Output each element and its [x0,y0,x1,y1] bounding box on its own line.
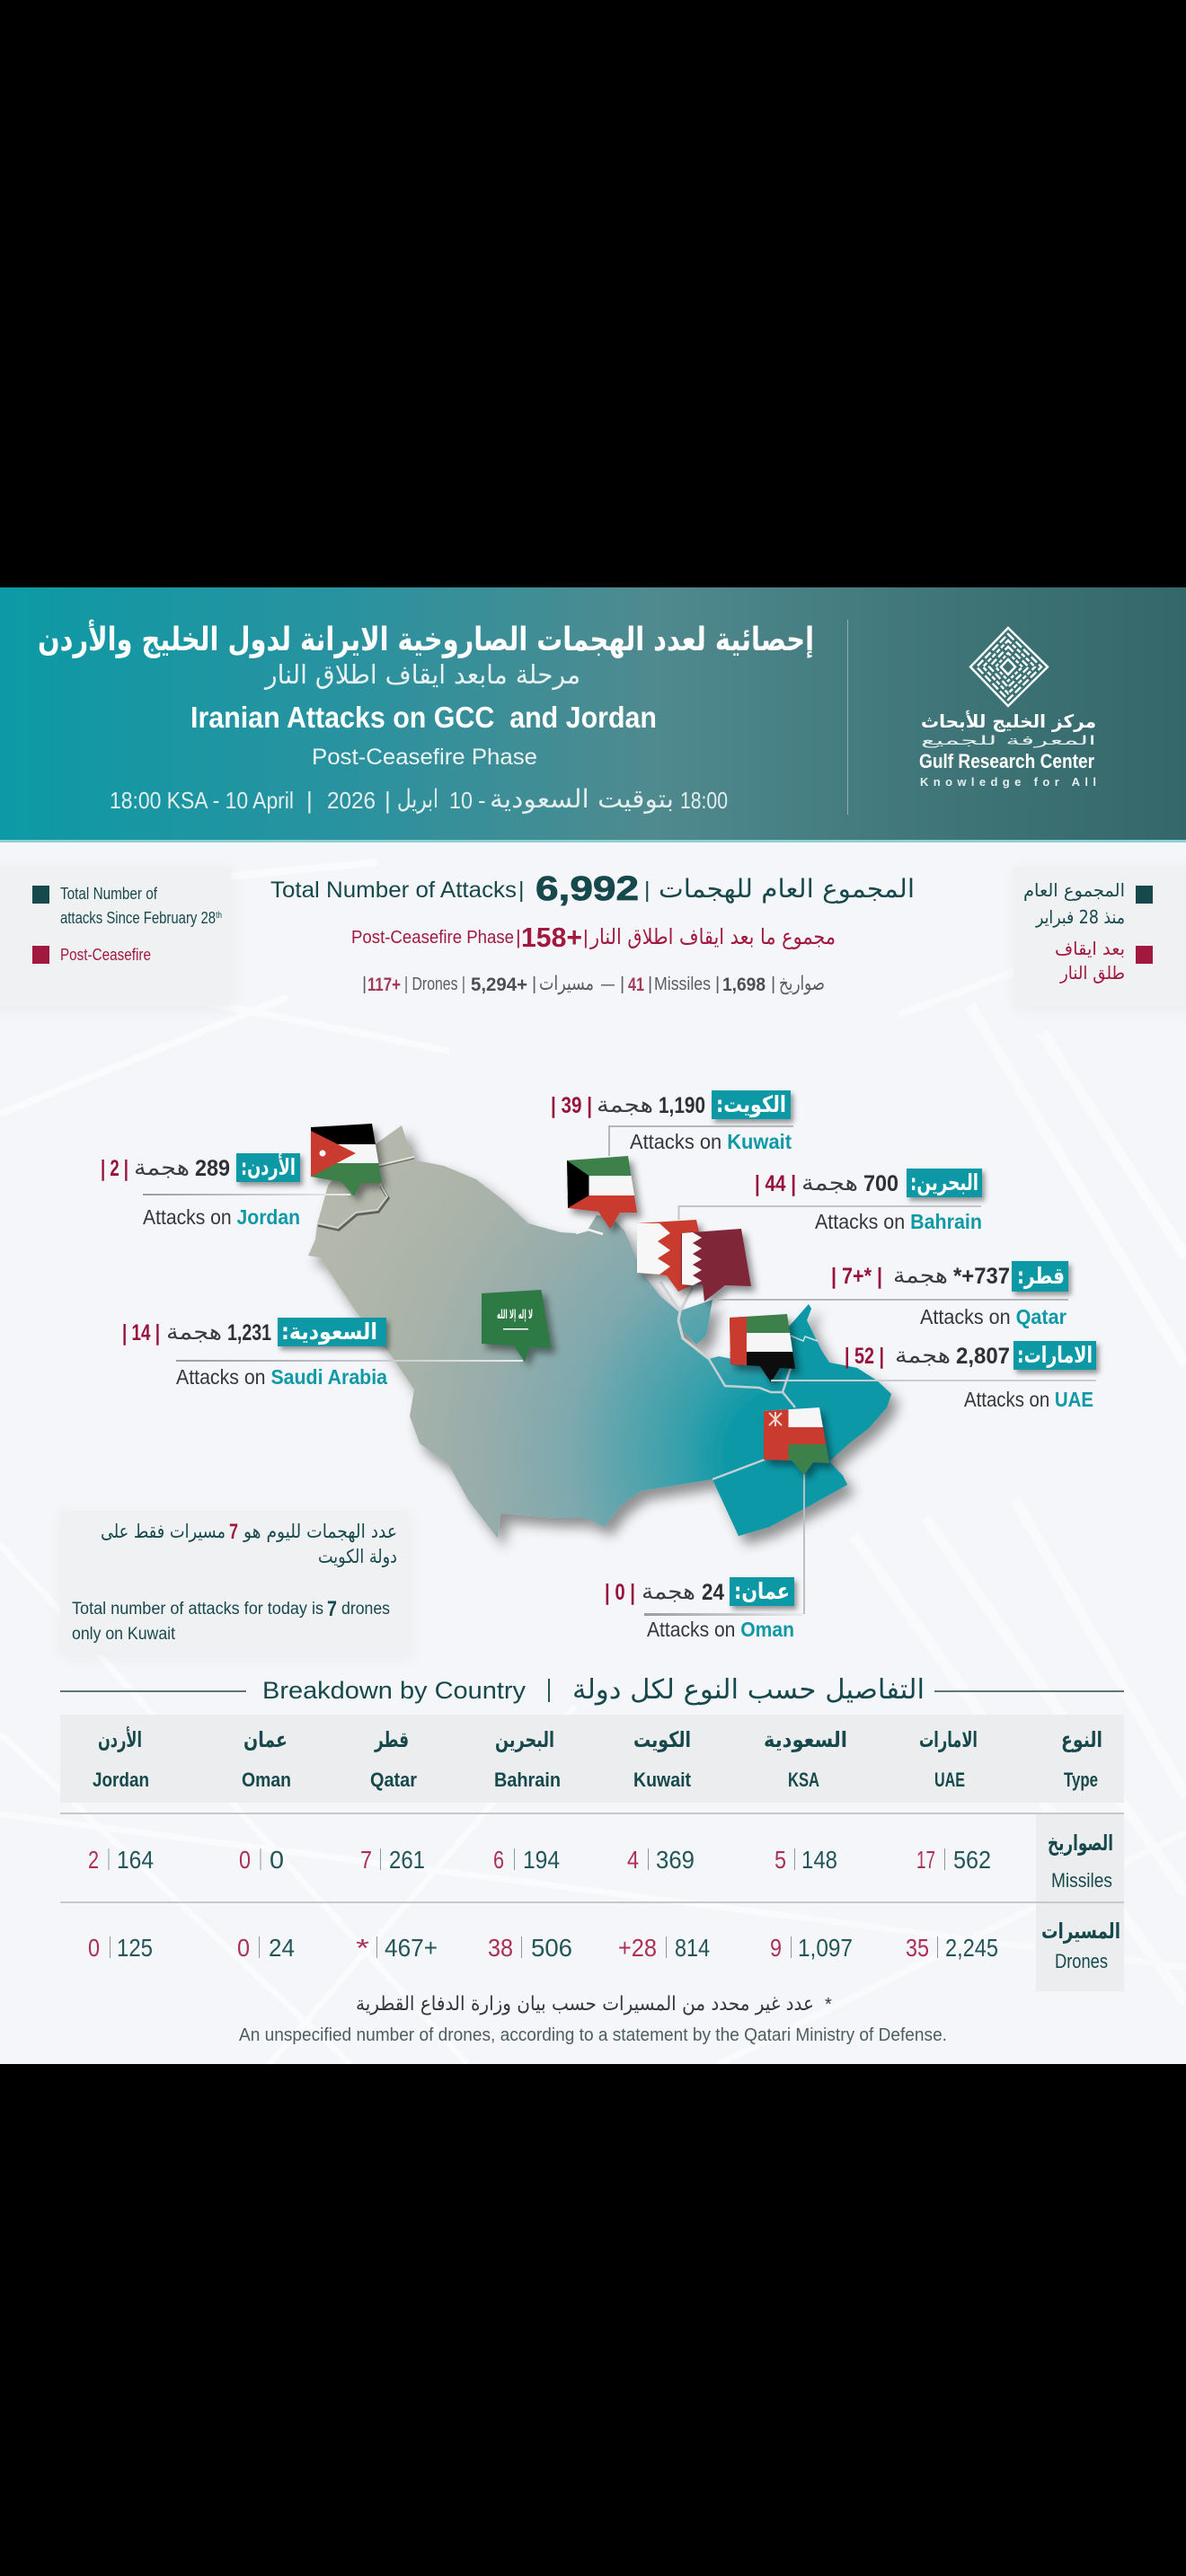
flag: Saudi Arabia [482,1290,552,1362]
missiles and drones summary: 5,294+ [471,975,527,995]
label: Qatar: قطر:‏ [1017,1263,1065,1290]
row: missiles: 0 [239,1846,251,1874]
legend Arabic: post-ceasefire: طلق النار [1059,962,1125,984]
legend: total attacks: th [216,911,222,921]
label: UAE: هجمة [895,1343,951,1368]
label: Jordan: Attacks on Jordan [143,1205,300,1229]
post-ceasefire total: | [583,926,589,948]
table header: Qatar [370,1769,417,1791]
legend: total attacks: attacks Since February 28 [60,909,248,927]
label: Qatar: Attacks on Qatar [920,1305,1067,1328]
label: UAE: 2,807 [956,1344,1010,1369]
legend Arabic: total: المجموع العام [1023,879,1125,901]
label: Oman: عمان:‏ [734,1578,790,1604]
map [308,1125,891,1614]
missiles and drones summary: | Drones | [404,975,465,994]
label: Bahrain: Attacks on Bahrain [815,1210,982,1233]
missiles and drones summary: 1,698 [722,975,766,995]
black upper band [0,0,1186,587]
missiles and drones summary: صواريخ [779,973,825,995]
label: UAE: | 52 | [845,1344,884,1369]
row: drones: 24 [269,1934,295,1962]
post-ceasefire total [351,922,836,953]
row: drones: المسيرات [1041,1919,1120,1944]
Arabic note [101,1520,397,1567]
row: missiles: 5 [774,1846,786,1874]
Oman connector line [803,1473,805,1614]
row: missiles: 562 [953,1846,991,1874]
total value: 6,992 [535,870,639,908]
flag: Oman [759,1403,836,1477]
legend panel: English [0,867,231,1006]
table header: Type [1064,1769,1098,1791]
label: Qatar: هجمة [893,1263,948,1288]
legend: post-ceasefire [32,946,151,964]
today's attacks note panel [60,1511,409,1654]
row: drones [88,1919,1120,1972]
footnote Arabic: * [825,1995,832,2015]
row: drones: Drones [1055,1950,1108,1972]
row: drones: 35 [906,1934,929,1962]
label: Bahrain: هجمة [801,1170,858,1195]
table header: الامارات [919,1727,978,1752]
logo diamond [970,628,1048,706]
date line: | [306,787,313,814]
breakdown heading [60,1674,1124,1706]
Arabic subtitle: مرحلة مابعد ايقاف اطلاق النار [263,659,580,690]
breakdown heading: Breakdown by Country [262,1677,527,1704]
row: missiles: 164 [117,1846,154,1874]
row: drones: 814 [675,1934,710,1962]
label: Kuwait: Attacks on Kuwait [630,1130,792,1153]
legend Arabic: post-ceasefire: بعد ايقاف [1055,938,1125,959]
Arabic note: مسيرات فقط على [101,1521,226,1542]
legend: total attacks [32,885,222,927]
missiles and drones summary [362,973,825,995]
Arabic note: 7 [229,1520,238,1544]
table header: النوع [1061,1727,1102,1752]
row: missiles: 17 [916,1846,935,1874]
total number of attacks: | [644,878,651,903]
label: Bahrain: 700 [863,1171,898,1196]
label: Oman: Attacks on Oman [647,1618,794,1641]
row: missiles: 148 [801,1846,837,1874]
English note [72,1597,390,1644]
table header: UAE [934,1769,965,1791]
row: drones: 38 [488,1934,513,1962]
table header: الأردن [98,1726,142,1752]
label: Bahrain: البحرين:‏ [910,1169,978,1196]
flag: UAE [730,1314,803,1389]
table header: السعودية [764,1727,847,1752]
missiles and drones summary: | [362,975,367,994]
legend: total attacks: Total Number of [60,885,158,903]
peninsula shape [308,1125,891,1539]
English note: only on Kuwait [72,1625,176,1644]
label: Qatar: *+737 [953,1264,1010,1289]
row: missiles: الصواريخ [1048,1831,1113,1856]
logo: Gulf Research Center [919,750,1094,772]
row: missiles: 7 [360,1846,372,1874]
table header [60,1715,1124,1803]
English note: 7 [327,1597,337,1621]
label: Saudi Arabia [122,1318,523,1389]
missiles and drones summary: 117+ [367,975,401,995]
flag: Kuwait [562,1153,642,1231]
footnote Arabic: عدد غير محدد من المسيرات حسب بيان وزارة الدفاع القطرية [356,1993,814,2016]
flag: Jordan [305,1121,386,1199]
black lower band [0,2064,1186,2576]
label: Qatar: | 7+* | [831,1264,882,1289]
logo: Knowledge for All [920,775,1096,789]
table header: قطر [374,1727,409,1752]
missiles and drones summary: | [532,975,536,994]
label: Jordan: | 2 | [101,1156,128,1181]
missiles and drones summary: Missiles [654,975,711,994]
label: Saudi Arabia: السعودية:‏ [281,1319,377,1345]
row: drones: 0 [88,1934,100,1962]
row: missiles: 369 [656,1846,695,1874]
label: Oman: | 0 | [605,1580,635,1605]
label: Jordan: 289 [195,1156,230,1181]
label: Kuwait: | 39 | [551,1093,592,1118]
legend Arabic: total: منذ 28 فبراير [1035,906,1125,928]
flag: Bahrain [637,1220,710,1292]
table header: Bahrain [494,1769,561,1791]
total number of attacks [270,870,915,908]
label: Jordan: هجمة [134,1155,190,1180]
table header: البحرين [495,1727,554,1752]
row: drones: 1,097 [798,1934,853,1962]
English note: Total number of attacks for today is [72,1600,323,1619]
English note: drones [341,1600,390,1619]
table header: KSA [788,1769,819,1791]
legend Arabic: total [1023,879,1153,928]
missiles and drones summary: | [771,975,775,994]
label: Saudi Arabia: Attacks on Saudi Arabia [176,1365,387,1389]
footnote English: An unspecified number of drones, according to a statement by the Qatari Ministry of Defense. [239,2025,947,2045]
date line: 2026 [327,787,376,814]
post-ceasefire total: Post-Ceasefire Phase [351,928,514,948]
post-ceasefire value: 158+ [521,922,582,953]
label: Qatar [714,1261,1068,1328]
logo text: مركز الخليج للأبحاث [921,710,1096,732]
label: Oman: 24 [702,1580,724,1605]
missiles and drones summary: 41 [628,975,644,995]
missiles and drones summary: | [620,975,624,994]
flag: Saudi Arabia: لا إله إلا الله [497,1308,533,1322]
English subtitle: Post-Ceasefire Phase [312,745,537,770]
label: Oman: هجمة [642,1579,695,1604]
English title: Iranian Attacks on GCC and Jordan [190,701,657,734]
row: missiles: 0 [270,1846,284,1874]
total number of attacks: المجموع العام للهجمات [659,874,915,904]
table header: Kuwait [633,1769,692,1791]
label: Saudi Arabia: هجمة [166,1319,222,1345]
missiles and drones summary: مسيرات [539,973,594,995]
label: UAE: Attacks on UAE [964,1388,1093,1411]
header banner [0,587,1186,842]
label: Kuwait [551,1090,793,1156]
breakdown heading: التفاصيل حسب النوع لكل دولة [572,1674,925,1706]
date line: 18:00 [680,787,728,814]
label: Saudi Arabia: 1,231 [227,1320,271,1345]
row: drones: 0 [237,1934,250,1962]
row: missiles: 6 [493,1846,504,1874]
label: Kuwait: 1,190 [659,1093,705,1118]
row: drones: 9 [770,1934,782,1962]
label: Jordan: الأردن:‏ [241,1153,296,1180]
breakdown table [60,1715,1124,1991]
legend: post-ceasefire: Post-Ceasefire [60,946,151,964]
row: missiles: 4 [627,1846,639,1874]
label: Jordan [101,1153,350,1229]
logo: المعرفة للجميع [921,734,1096,748]
flag: Qatar [681,1229,751,1301]
label: Bahrain: | 44 | [755,1171,796,1196]
post-ceasefire total: مجموع ما بعد ايقاف اطلاق النار [589,924,836,949]
Oman and UAE solid area [712,1304,891,1536]
label: Bahrain [679,1169,982,1233]
row: drones: 2,245 [945,1934,998,1962]
date line [110,784,728,814]
row: drones: 467+ [385,1934,438,1962]
row: missiles: 2 [88,1846,99,1874]
row: missiles: 261 [389,1846,425,1874]
date line: 10 [449,787,473,814]
label: UAE [771,1341,1096,1411]
total number of attacks: Total Number of Attacks [270,878,517,903]
missiles and drones summary: — [601,975,615,994]
total number of attacks: | [518,878,525,903]
date line: 18:00 KSA - 10 April [110,787,294,814]
missiles and drones summary: | [648,975,652,994]
label: Kuwait: هجمة [597,1092,653,1117]
Arabic note: عدد الهجمات لليوم هو [243,1521,397,1542]
logo [919,628,1096,789]
date line: | [385,787,391,814]
row: missiles: 194 [523,1846,560,1874]
missiles and drones summary: | [715,975,720,994]
page background [0,840,1186,2064]
label: Saudi Arabia: | 14 | [122,1320,160,1345]
date line: ابريل [397,784,438,814]
legend Arabic: post-ceasefire [1055,938,1153,984]
Arabic note: دولة الكويت [318,1546,397,1567]
table header: الكويت [633,1727,691,1752]
label: UAE: الامارات:‏ [1017,1342,1093,1368]
label: Kuwait: الكويت:‏ [716,1091,786,1118]
date line: - [478,787,486,814]
row: drones: 506 [531,1934,572,1962]
table header: Jordan [93,1769,149,1791]
country borders [317,1157,818,1479]
date line: بتوقيت السعودية [490,784,674,814]
Arabic title: إحصائية لعدد الهجمات الصاروخية الايرانة لدول الخليج والأردن [38,619,814,658]
table header: عمان [243,1727,288,1752]
row: missiles: Missiles [1051,1869,1112,1892]
post-ceasefire total: | [516,926,521,948]
label: Oman [605,1577,803,1641]
row: drones: * [356,1934,369,1962]
row: drones: +28 [618,1934,657,1962]
row: missiles [88,1831,1113,1892]
legend panel: Arabic [1013,867,1186,1006]
table header: Oman [242,1769,291,1791]
row: drones: 125 [117,1934,153,1962]
